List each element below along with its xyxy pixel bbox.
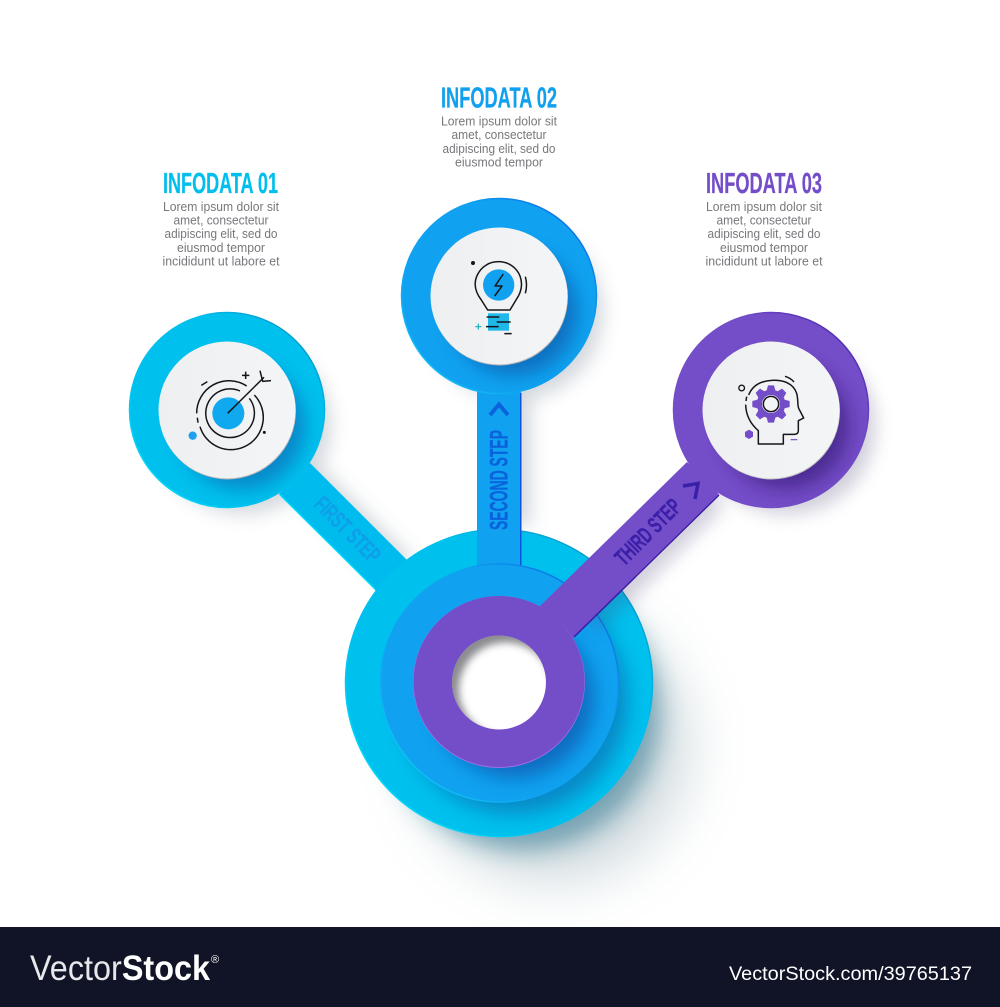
arm highlight edge	[280, 494, 375, 589]
shadow: second step	[427, 224, 603, 525]
disc: first step	[158, 342, 296, 480]
heading: infodata 01: INFODATA 01	[163, 168, 278, 200]
hub centre hole	[452, 636, 546, 730]
arm: third step	[538, 462, 719, 640]
arm label: first step: FIRST STEP	[309, 491, 386, 568]
icon: light bulb	[471, 261, 526, 334]
heading block: infodata 01	[162, 168, 280, 268]
disc shadow: first step	[179, 363, 305, 489]
text: infodata 01 body: eiusmod tempor	[177, 241, 265, 255]
arm chevron: third step	[683, 484, 698, 499]
heading block: infodata 03	[706, 168, 823, 268]
text: infodata 01 body: Lorem ipsum dolor sit	[163, 200, 280, 214]
heading block: infodata 02	[441, 82, 558, 169]
text: infodata 03 body: amet, consectetur	[716, 214, 812, 228]
arm: second step	[477, 385, 521, 570]
text: infodata 02 body: adipiscing elit, sed do	[442, 142, 556, 156]
circle: first step	[130, 312, 324, 508]
arm chevron: second step	[490, 404, 508, 415]
hub middle ring	[380, 564, 618, 802]
arm edge	[520, 393, 522, 565]
footer logo: VectorStock	[30, 949, 210, 988]
panel: third step	[538, 312, 875, 640]
text: infodata 01 body	[162, 200, 280, 268]
arm: first step	[279, 463, 412, 595]
circle: second step	[402, 198, 596, 394]
shadow: third step	[582, 338, 875, 630]
text: infodata 03 body	[706, 200, 823, 268]
arm label: second step: SECOND STEP	[486, 430, 514, 530]
footer url: VectorStock.com/39765137	[729, 964, 972, 985]
circle: third step	[674, 312, 868, 508]
heading: infodata 03: INFODATA 03	[706, 168, 822, 200]
icon: head with gear	[739, 376, 804, 444]
text: infodata 02 body: Lorem ipsum dolor sit	[441, 115, 558, 129]
text: infodata 03 body: incididunt ut labore et	[706, 254, 823, 268]
heading: infodata 02: INFODATA 02	[441, 82, 557, 114]
shadow: first step	[155, 338, 412, 584]
text: infodata 02 body: amet, consectetur	[452, 128, 546, 142]
disc: third step	[702, 342, 840, 480]
disc: second step	[430, 228, 568, 366]
disc shadow: second step	[451, 249, 577, 375]
arm edge	[574, 495, 719, 637]
text: infodata 03 body: adipiscing elit, sed do	[708, 227, 821, 241]
inner ring shadow	[434, 618, 594, 778]
text: infodata 01 body: amet, consectetur	[174, 214, 268, 228]
footer band	[0, 927, 1000, 1007]
footer registered mark: ®	[211, 954, 219, 966]
mid ring shadow	[400, 586, 628, 814]
icon: target with arrow	[188, 371, 271, 450]
text: infodata 02 body	[441, 115, 558, 169]
gear	[752, 385, 790, 423]
text: infodata 01 body: adipiscing elit, sed do	[164, 227, 278, 241]
hub outer ring	[346, 530, 652, 836]
text: infodata 03 body: eiusmod tempor	[720, 241, 808, 255]
panel: second step	[402, 198, 603, 570]
hub drop shadow	[384, 574, 688, 881]
disc shadow: third step	[723, 363, 849, 489]
text: infodata 03 body: Lorem ipsum dolor sit	[706, 200, 823, 214]
text: infodata 02 body: eiusmod tempor	[455, 155, 543, 169]
panel: first step	[130, 312, 412, 595]
text: infodata 01 body: incididunt ut labore et	[162, 254, 280, 268]
hub inner ring	[413, 596, 585, 768]
arm label: third step: THIRD STEP	[609, 493, 686, 570]
